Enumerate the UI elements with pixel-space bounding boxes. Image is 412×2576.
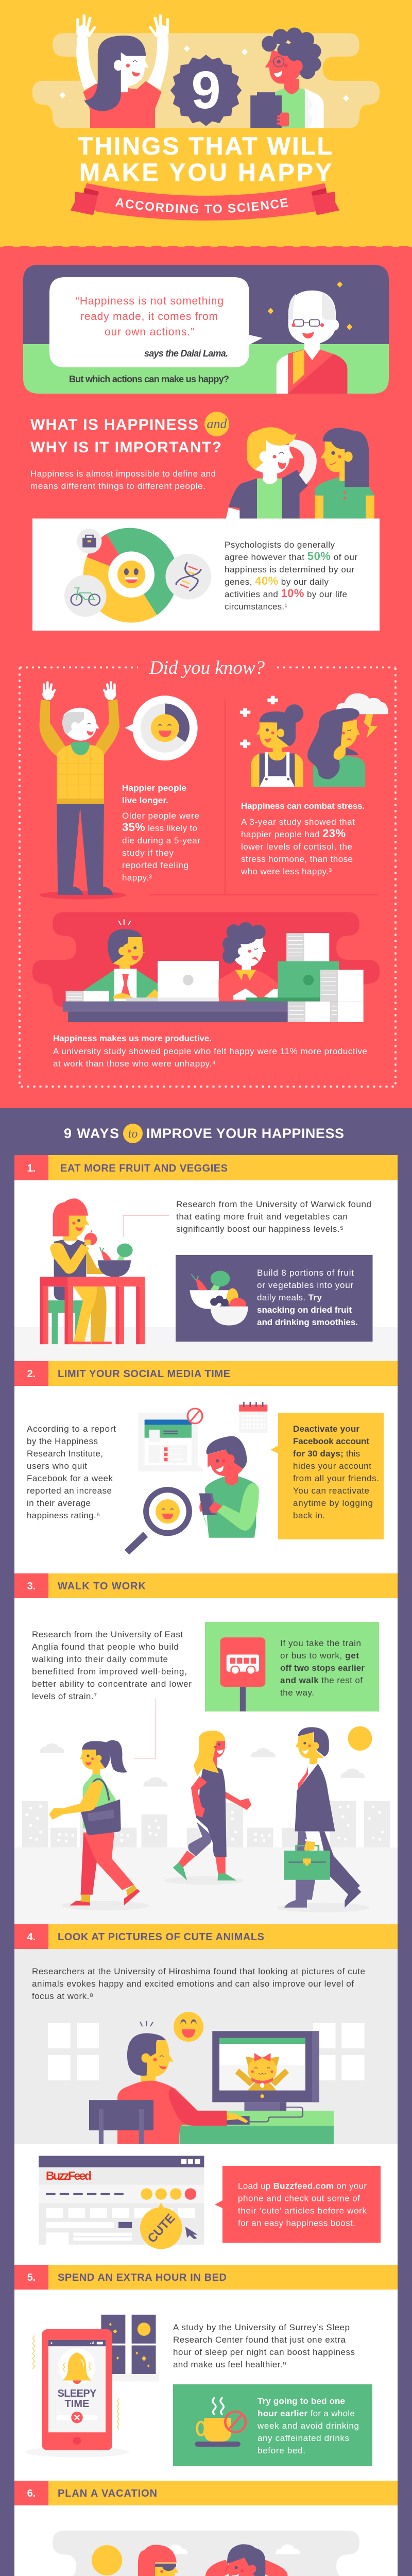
text: happier people live longer: Happier people	[122, 783, 186, 793]
text: happier people live longer: study if they	[122, 848, 174, 858]
icon: no caffeine	[195, 2398, 246, 2447]
text: University of Surrey	[173, 2323, 355, 2369]
callout: deactivate Facebook	[270, 1413, 384, 1539]
illustration: office workers	[32, 912, 380, 1022]
walker: woman with bag	[49, 1740, 140, 1906]
text: happiness can combat stress: stress hormone, than those	[241, 854, 353, 864]
callout: bed one hour earlier: hour earlier for a whole	[258, 2409, 355, 2418]
header: tip 3	[14, 1573, 398, 1598]
callout: build 8 portions: snacking on dried fruit	[257, 1305, 352, 1315]
text: Happiness Research Institute: users who quit	[27, 1461, 87, 1471]
window	[101, 2315, 159, 2382]
illustration: alarm phone and window: SLEEPY	[58, 2388, 97, 2399]
text: University of Surrey: hour of sleep per night can boost happiness	[173, 2347, 355, 2357]
connector	[123, 1216, 169, 1237]
callout: build 8 portions: Build 8 portions of fruit	[257, 1268, 354, 1278]
header: tip 1: 1.	[27, 1163, 36, 1174]
illustration: person at computer	[48, 2021, 365, 2144]
text: happier people live longer	[122, 783, 200, 883]
person	[89, 2021, 250, 2144]
callout: load up BuzzFeed: their ‘cute’ articles before work	[238, 2206, 367, 2215]
text: psychologists: activities and 10% by our life	[225, 587, 347, 600]
ribbon banner: ACCORDING TO SCIENCE	[115, 198, 288, 213]
callout: bed one hour earlier	[173, 2384, 372, 2466]
callout: deactivate Facebook: Facebook account	[293, 1436, 369, 1446]
header: tip 6: PLAN A VACATION	[58, 2488, 157, 2499]
text: Warwick research: that eating more fruit and vegetables can	[176, 1212, 348, 1222]
text: happier people live longer: reported feeling	[122, 860, 188, 870]
text: productivity: A university study showed people who felt happy were 11% more productive	[53, 1046, 367, 1056]
walker: blonde woman	[173, 1731, 251, 1880]
text: happiness can combat stress: Happiness can combat stress.	[241, 801, 365, 811]
man relaxing	[205, 2544, 288, 2576]
header: tip 5	[14, 2265, 398, 2290]
man with phone	[199, 1436, 259, 1538]
callout: train or bus: or bus to work, get	[280, 1651, 359, 1660]
text: productivity	[53, 1033, 367, 1069]
callout: build 8 portions: daily meals. Try	[257, 1293, 322, 1302]
text: psychologists: genes, 40% by our daily	[225, 574, 329, 587]
heading: 9 ways to improve your happiness	[64, 1124, 344, 1143]
quote text: “Happiness is not something	[76, 295, 224, 307]
text: Happiness Research Institute: Facebook for a week	[27, 1473, 113, 1483]
header: tip 1	[14, 1155, 398, 1180]
illustration: couple on vacation	[32, 2531, 380, 2576]
header: tip 4	[14, 1924, 398, 1949]
speech bubble with donut	[125, 696, 198, 760]
header: tip 1: EAT MORE FRUIT AND VEGGIES	[60, 1163, 228, 1174]
callout: bed one hour earlier: any caffeinated drinks	[258, 2433, 349, 2443]
callout: load up BuzzFeed: for an easy happiness boost.	[238, 2218, 355, 2228]
callout: build 8 portions: or vegetables into your	[257, 1280, 353, 1290]
scientist	[250, 27, 324, 128]
text: happier people live longer: live longer.	[122, 795, 168, 805]
text: productivity: at work than those who were unhappy.⁴	[53, 1059, 216, 1069]
illustration: BuzzFeed browser: CUTE	[145, 2211, 178, 2246]
left worker	[84, 929, 158, 1003]
callout: train or bus: off two stops earlier	[280, 1663, 365, 1673]
illustration: BuzzFeed browser: BuzzFeed	[46, 2169, 92, 2182]
header: tip 4: 4.	[27, 1931, 36, 1943]
header: tip 3: 3.	[27, 1581, 36, 1592]
text: University of Surrey: A study by the University of Surrey’s Sleep	[173, 2323, 350, 2332]
header: tip 3: WALK TO WORK	[58, 1581, 146, 1592]
text: psychologists: happiness is determined by our	[225, 565, 354, 574]
text: productivity: Happiness makes us more productive.	[53, 1033, 212, 1043]
title: MAKE YOU HAPPY	[79, 159, 332, 187]
header: tip 6	[14, 2481, 398, 2505]
callout: deactivate Facebook: for 30 days; this	[293, 1449, 360, 1459]
speech bubble	[49, 277, 263, 367]
magnifying glass	[125, 1487, 192, 1554]
callout: deactivate Facebook: hides your account	[293, 1461, 371, 1471]
right worker	[218, 922, 278, 1001]
text: happiness definition: Happiness is almost impossible to define and	[30, 469, 216, 479]
heading: what is happiness: and	[207, 416, 228, 431]
title: THINGS THAT WILL	[78, 133, 332, 160]
donut chart	[64, 528, 211, 623]
heading: 9 ways to improve your happiness: 9 WAYS	[64, 1126, 119, 1141]
panel: happiness factors	[32, 518, 380, 631]
header: tip 2: 2.	[27, 1368, 36, 1380]
illustration: stress women	[240, 693, 388, 787]
callout: deactivate Facebook: anytime by logging	[293, 1498, 373, 1508]
icon: bus stop	[220, 1637, 265, 1711]
illustration: older man	[40, 682, 198, 900]
callout: deactivate Facebook: back in.	[293, 1511, 325, 1520]
text: University of Surrey: and make us feel healthier.⁹	[173, 2360, 286, 2369]
callout: train or bus: the way.	[280, 1688, 314, 1698]
callout: load up BuzzFeed	[215, 2166, 381, 2243]
text: Happiness Research Institute: reported an increase	[27, 1486, 112, 1496]
text: University of East Anglia: better ability to concentrate and lower	[32, 1679, 192, 1689]
did you know frame: Did you know?	[149, 657, 265, 679]
did you know frame	[20, 657, 396, 1087]
text: happiness definition	[30, 469, 216, 491]
callout: deactivate Facebook: from all your friends.	[293, 1473, 379, 1483]
text: Happiness Research Institute	[27, 1424, 116, 1520]
Dalai Lama figure	[268, 281, 352, 394]
panel: Dalai Lama quote: But which actions can make us happy?	[69, 374, 229, 384]
text: psychologists	[225, 540, 357, 612]
illustration: couple	[226, 427, 374, 519]
text: Happiness Research Institute: in their average	[27, 1498, 91, 1508]
illustration: alarm phone and window: TIME	[65, 2398, 90, 2410]
text: happiness can combat stress: who were less happy.³	[241, 867, 332, 876]
text: University of East Anglia: benefitted from improved well-being,	[32, 1667, 187, 1676]
panel: Dalai Lama quote	[23, 265, 389, 394]
callout: bed one hour earlier: week and avoid drinking	[257, 2421, 359, 2431]
text: Warwick research: Research from the University of Warwick found	[176, 1199, 371, 1209]
emoji: happy	[174, 2012, 203, 2042]
text: happier people live longer: die during a 5-year	[122, 836, 200, 845]
callout: load up BuzzFeed: phone and check out some of	[238, 2194, 360, 2203]
header: tip 2	[14, 1361, 398, 1386]
illustration: BuzzFeed browser	[39, 2156, 204, 2249]
callout: bed one hour earlier: Try going to bed one	[258, 2396, 345, 2406]
header cloud	[32, 33, 380, 128]
starburst badge	[171, 55, 241, 126]
callout: build 8 portions: and drinking smoothies.	[257, 1317, 358, 1327]
text: psychologists: Psychologists do generally	[225, 540, 335, 550]
illustration: phone user and Facebook	[125, 1402, 267, 1554]
text: University of East Anglia: Research from the University of East	[32, 1630, 183, 1639]
text: Happiness Research Institute: happiness rating.⁶	[27, 1511, 100, 1520]
callout: bed one hour earlier: before bed.	[258, 2446, 305, 2455]
text: psychologists: agree however that 50% of our	[225, 550, 357, 563]
text: happier people live longer: 35% less likely to	[122, 821, 197, 834]
text: University of East Anglia: levels of strain.⁷	[32, 1691, 97, 1701]
woman in sunglasses	[124, 2545, 190, 2576]
title	[78, 133, 332, 187]
text: Warwick research	[176, 1199, 371, 1234]
icon: bowls	[190, 1271, 248, 1326]
callout: train or bus: and walk the rest of	[280, 1675, 363, 1685]
text: Happiness Research Institute: by the Happiness	[27, 1436, 98, 1446]
callout: load up BuzzFeed: Load up Buzzfeed.com on your	[238, 2181, 367, 2191]
quote text: ready made, it comes from	[80, 311, 218, 323]
header: tip 5: SPEND AN EXTRA HOUR IN BED	[58, 2272, 227, 2283]
callout: deactivate Facebook: You can reactivate	[293, 1486, 369, 1496]
callout: deactivate Facebook: Deactivate your	[293, 1424, 359, 1434]
panel: Dalai Lama quote: says the Dalai Lama.	[144, 348, 228, 359]
header: tip 6: 6.	[27, 2488, 36, 2499]
text: University of Hiroshima: animals evokes happy and excited emotions and can also improve our level of	[32, 1979, 354, 1989]
text: Warwick research: significantly boost our happiness levels.⁵	[176, 1224, 344, 1234]
text: happiness definition: means different things to different people.	[30, 481, 205, 491]
callout: build 8 portions	[176, 1255, 373, 1342]
text: University of East Anglia: Anglia found that people who build	[32, 1642, 179, 1652]
text: happiness can combat stress	[241, 801, 365, 876]
heading: what is happiness: WHAT IS HAPPINESS	[30, 416, 198, 433]
quote text: our own actions.”	[105, 326, 194, 338]
quote text	[76, 295, 224, 338]
header illustration: happy woman, badge and scientist	[32, 15, 380, 128]
monitor with kitten	[212, 2031, 319, 2102]
ribbon banner	[70, 183, 340, 221]
text: Happiness Research Institute: According to a report	[27, 1424, 116, 1434]
text: happier people live longer: Older people were	[122, 811, 199, 821]
text: University of Surrey: Research Center found that just one extra	[173, 2335, 346, 2345]
header: tip 5: 5.	[27, 2272, 36, 2283]
computer and papers	[63, 933, 364, 1022]
text: happiness can combat stress: happier people had 23%	[241, 827, 346, 840]
text: University of East Anglia	[31, 1630, 192, 1701]
Facebook bubble	[138, 1409, 205, 1471]
calendar	[239, 1402, 267, 1433]
illustration: walking to work	[14, 1699, 398, 1924]
illustration: alarm phone and window	[25, 2315, 159, 2458]
text: University of Hiroshima: focus at work.⁸	[32, 1991, 93, 2001]
phone	[32, 2329, 119, 2450]
header: tip 2: LIMIT YOUR SOCIAL MEDIA TIME	[58, 1368, 230, 1380]
woman with raised arms	[76, 15, 169, 128]
header: tip 4: LOOK AT PICTURES OF CUTE ANIMALS	[58, 1931, 264, 1943]
text: happiness can combat stress: lower levels of cortisol, the	[241, 842, 352, 852]
badge number: 9	[191, 60, 221, 120]
walker: businessman	[284, 1727, 362, 1908]
laptop	[158, 961, 219, 1001]
text: Happiness Research Institute: Research Institute,	[27, 1449, 103, 1459]
heading: 9 ways to improve your happiness: IMPROVE YOUR HAPPINESS	[146, 1126, 344, 1141]
callout: train or bus: If you take the train	[280, 1638, 361, 1648]
heading: 9 ways to improve your happiness: to	[128, 1127, 138, 1141]
text: psychologists: circumstances.¹	[225, 602, 287, 612]
text: University of Hiroshima: Researchers at the University of Hiroshima found that looking at pictures of cute	[32, 1967, 365, 1976]
city buildings	[22, 1801, 390, 1848]
illustration: woman eating	[40, 1198, 169, 1344]
heading: what is happiness: WHY IS IT IMPORTANT?	[30, 439, 221, 456]
text: happier people live longer: happy.²	[122, 873, 152, 883]
text: happiness can combat stress: A 3-year study showed that	[241, 817, 355, 827]
heading: what is happiness	[30, 412, 229, 456]
callout: train or bus	[205, 1622, 379, 1711]
text: University of East Anglia: walking into their daily commute	[31, 1654, 168, 1664]
text: University of Hiroshima	[32, 1967, 365, 2001]
